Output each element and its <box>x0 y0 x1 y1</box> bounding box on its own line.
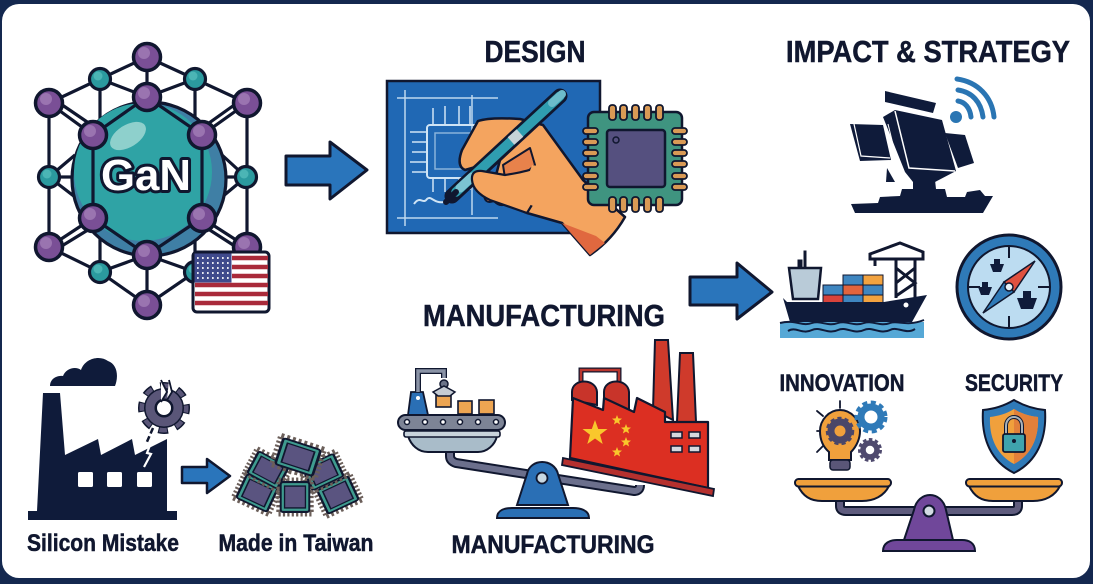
robot arm and boxes <box>408 371 494 415</box>
label: innovation: INNOVATION <box>780 370 904 397</box>
water <box>780 322 924 338</box>
icon: container ship and crane <box>780 243 927 338</box>
arrow: GaN to design <box>286 142 367 199</box>
arrow: factory to chips <box>182 459 230 493</box>
China flag stars <box>582 415 631 456</box>
wireless signal <box>950 79 994 123</box>
icon: naval radar <box>850 79 994 213</box>
blue gear <box>856 402 886 432</box>
blueprint sheet <box>387 81 600 233</box>
factory silhouette <box>28 393 177 520</box>
right pan <box>966 479 1062 501</box>
icon: manufacturing balance scale <box>398 340 714 518</box>
label: made in Taiwan: Made in Taiwan <box>218 530 374 557</box>
hand palm cover <box>520 165 590 222</box>
pen <box>446 94 562 202</box>
heading: manufacturing: MANUFACTURING <box>423 298 665 333</box>
icon: compass with ships <box>957 235 1061 339</box>
scale beam <box>450 453 640 491</box>
GaN sphere <box>72 97 226 256</box>
icon: GaN crystal lattice <box>36 44 260 318</box>
superstructure <box>789 268 821 299</box>
broken gear <box>142 380 186 444</box>
China factory <box>562 340 714 496</box>
icon: security shield <box>983 400 1045 473</box>
icon: US flag <box>193 252 269 312</box>
microchip <box>583 105 687 212</box>
left pan <box>795 479 891 501</box>
label: silicon mistake: Silicon Mistake <box>27 530 179 557</box>
containers <box>823 275 883 303</box>
icon: blueprint with hand, pen and chip <box>387 81 687 255</box>
GaN label: GaN <box>101 151 191 200</box>
caption: manufacturing: MANUFACTURING <box>452 531 654 559</box>
dark gear <box>860 440 880 460</box>
icon: innovation and security balance scale <box>795 479 1062 551</box>
icon: pile of chips <box>233 435 362 517</box>
cloud <box>50 358 117 386</box>
balance arm <box>840 499 1018 511</box>
label: security: SECURITY <box>965 370 1063 397</box>
crane <box>870 243 923 298</box>
conveyor bowl <box>398 415 505 452</box>
bulb gear <box>828 418 852 444</box>
icon: factory with broken gear <box>28 358 186 520</box>
index finger <box>472 168 538 213</box>
hull <box>783 295 927 322</box>
heading: design: DESIGN <box>484 34 586 69</box>
arrow: manufacturing to impact <box>690 263 772 319</box>
hand <box>460 118 625 255</box>
fulcrum <box>497 462 589 518</box>
balance fulcrum <box>883 495 975 551</box>
icon: light bulb with gears <box>817 401 886 470</box>
